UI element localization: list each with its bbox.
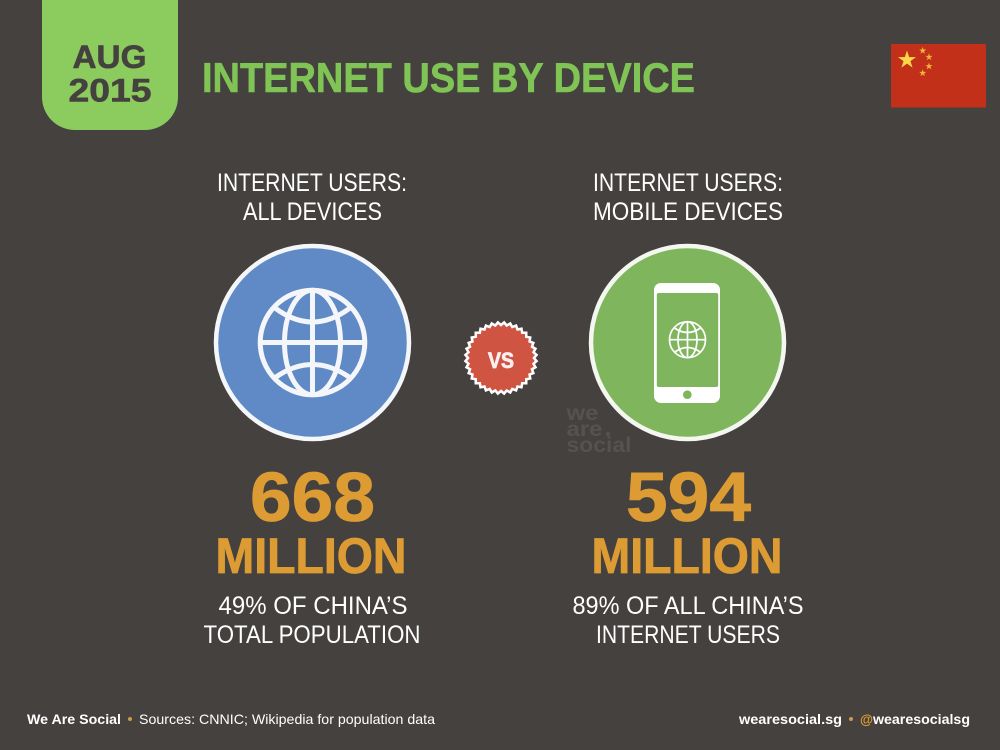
- left heading: [217, 169, 407, 226]
- watermark: social: [566, 434, 632, 457]
- date tab: [42, 0, 178, 130]
- right heading: INTERNET USERS:: [593, 169, 783, 197]
- footer links: [738, 711, 970, 727]
- left description: 49% OF CHINA’S: [218, 592, 408, 620]
- footer links: wearesocial.sg: [738, 711, 842, 727]
- icon: phone in green circle: [591, 246, 784, 439]
- right heading: [593, 169, 783, 226]
- right stat: 594: [626, 458, 751, 536]
- watermark: [565, 402, 632, 457]
- footer links: @: [860, 711, 873, 727]
- date tab: AUG: [72, 39, 146, 75]
- footer links: wearesocialsg: [872, 711, 970, 727]
- left description: [204, 592, 420, 649]
- flag: China: [891, 44, 986, 108]
- footer sources: Sources: CNNIC; Wikipedia for population data: [139, 711, 435, 727]
- date tab: 2015: [68, 72, 152, 108]
- watermark: we: [565, 402, 598, 425]
- watermark: are: [566, 418, 602, 441]
- left description: TOTAL POPULATION: [204, 621, 420, 649]
- left heading: ALL DEVICES: [243, 198, 382, 226]
- icon: globe in blue circle: [216, 246, 409, 439]
- left unit: MILLION: [216, 528, 406, 584]
- vs badge: VS: [488, 348, 514, 373]
- right unit: MILLION: [592, 528, 782, 584]
- title: INTERNET USE BY DEVICE: [202, 54, 695, 101]
- right description: INTERNET USERS: [596, 621, 780, 649]
- vs badge: [464, 321, 538, 395]
- right description: 89% OF ALL CHINA’S: [572, 592, 804, 620]
- right description: [572, 592, 804, 649]
- left heading: INTERNET USERS:: [217, 169, 407, 197]
- left stat: 668: [250, 458, 375, 536]
- right heading: MOBILE DEVICES: [593, 198, 783, 226]
- footer sources: We Are Social: [27, 711, 121, 727]
